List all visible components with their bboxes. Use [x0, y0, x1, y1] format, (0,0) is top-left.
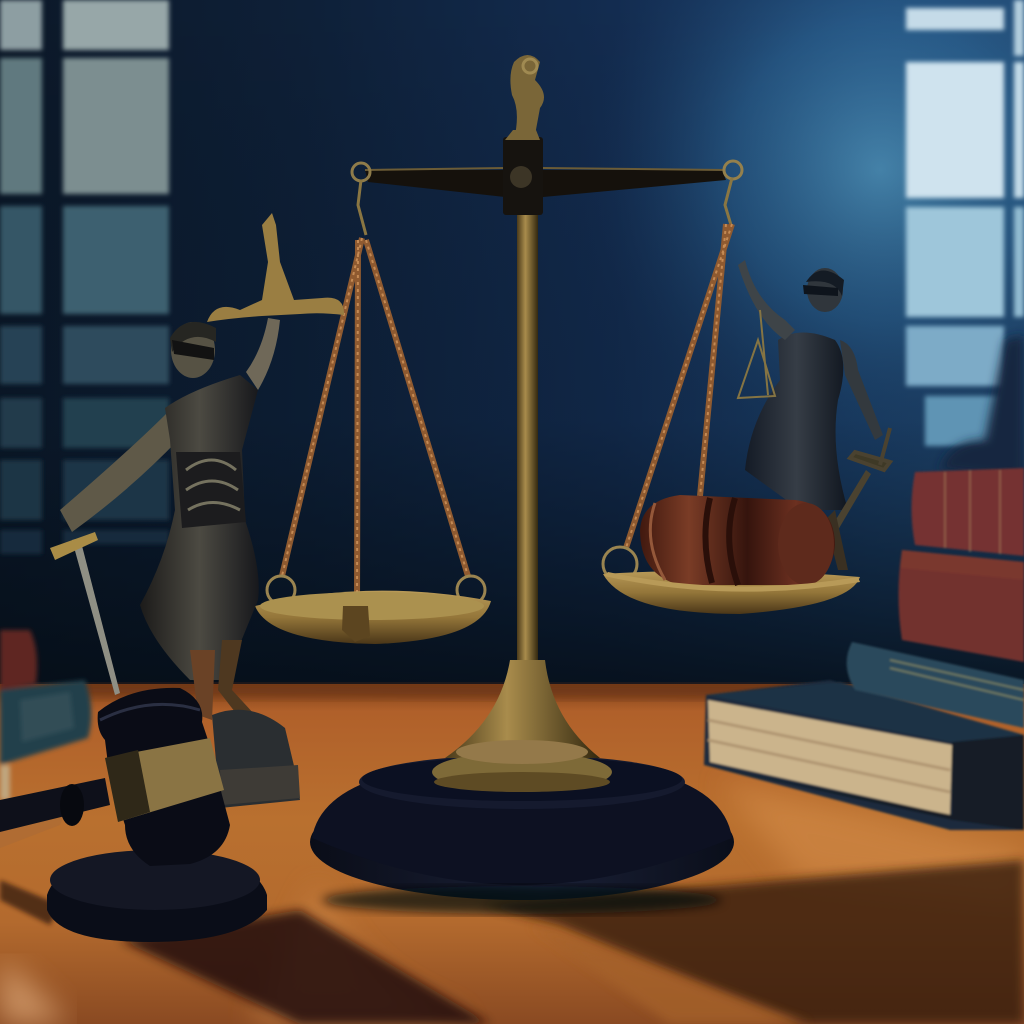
sound block: [47, 850, 267, 942]
head: [171, 322, 215, 378]
gavel on left: [0, 688, 267, 942]
brass foot: [445, 660, 600, 758]
right window: [906, 0, 1024, 446]
statue base: [212, 710, 300, 808]
shadow beneath scale base: [322, 886, 722, 914]
left pan and cords: [255, 238, 491, 644]
left statue: blindfolded justice: [50, 213, 344, 808]
wall background: [0, 0, 1024, 700]
book: red middle volume: [898, 550, 1024, 662]
crown-like scale arm: [207, 213, 344, 322]
head: [98, 688, 230, 866]
right pan front rim: [604, 572, 860, 592]
gavel head on right pan: [640, 495, 835, 585]
raised arm: [246, 318, 280, 390]
legs: [190, 650, 215, 720]
dark chair silhouette at right window: [940, 335, 1024, 480]
book: bottom white-page volume: [704, 680, 1024, 830]
book: blue volume: [847, 642, 1024, 728]
sword: [72, 538, 120, 695]
outstretched arm: [60, 412, 178, 532]
scale beam: [352, 55, 742, 235]
table top: [0, 684, 1024, 1024]
scale stand: [310, 214, 734, 900]
book: red top volume: [912, 468, 1024, 556]
base puck: [310, 784, 734, 900]
right statue: justice holding small scales: [738, 260, 890, 570]
torso and dress: [140, 375, 259, 680]
handle: [0, 778, 110, 832]
right pan with cords: [603, 224, 860, 614]
brass band: [105, 738, 224, 822]
books stack right: [704, 468, 1024, 830]
books stack left: [0, 630, 91, 800]
left window: [0, 0, 169, 554]
